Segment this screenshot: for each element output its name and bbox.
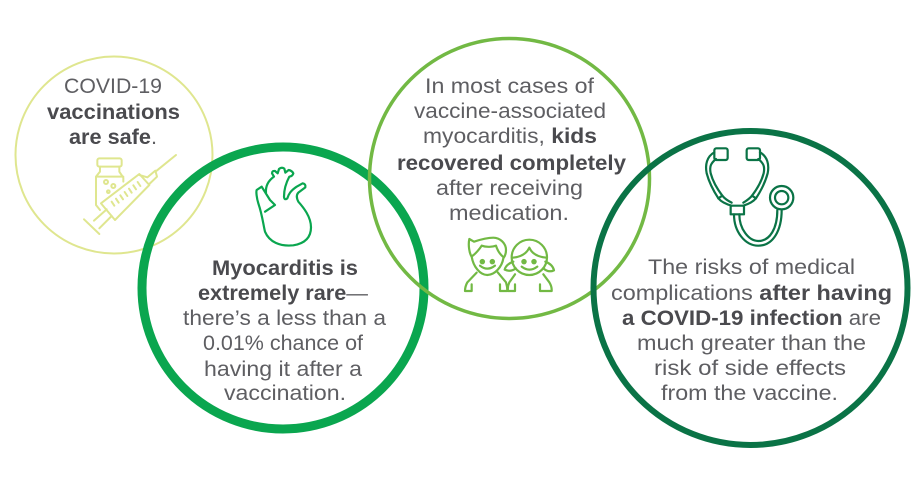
icon: stethoscope	[706, 148, 793, 246]
text: recovery statement: vaccine-associated	[414, 100, 606, 123]
text: risk statement: much greater than the	[637, 332, 866, 355]
text: myocarditis statement: vaccination.	[224, 382, 346, 405]
text: vaccinations are safe	[47, 75, 180, 149]
text: myocarditis statement	[183, 257, 386, 405]
text: recovery statement: myocarditis, kids	[423, 125, 597, 148]
text: risk statement: a COVID-19 infection are	[622, 307, 881, 330]
text: recovery statement: recovered completely	[397, 152, 626, 175]
text: recovery statement: medication.	[449, 202, 569, 225]
panel: medical complications	[594, 131, 908, 445]
text: risk statement: complications after having	[611, 282, 892, 305]
text: recovery statement: In most cases of	[425, 75, 594, 98]
text: myocarditis statement: having it after a	[204, 358, 362, 381]
panel: vaccinations are safe	[16, 56, 212, 254]
text: vaccinations are safe: are safe.	[69, 126, 157, 149]
text: vaccinations are safe: COVID-19	[64, 75, 162, 98]
text: recovery statement: after receiving	[436, 177, 583, 200]
icon: vial and syringe	[84, 155, 176, 234]
text: risk statement: from the vaccine.	[661, 382, 838, 405]
icon: two children	[465, 238, 554, 291]
icon: heart	[256, 168, 311, 246]
panel: kids recovered completely	[370, 38, 650, 318]
text: myocarditis statement: 0.01% chance of	[203, 332, 363, 355]
text: risk statement	[611, 256, 892, 405]
text: risk statement: The risks of medical	[648, 256, 855, 279]
text: myocarditis statement: there’s a less than a	[183, 307, 386, 330]
text: risk statement: risk of side effects	[654, 357, 846, 380]
text: recovery statement	[397, 75, 626, 225]
panel: myocarditis is extremely rare	[142, 147, 424, 429]
text: vaccinations are safe: vaccinations	[47, 101, 180, 124]
text: myocarditis statement: extremely rare—	[198, 282, 368, 305]
text: myocarditis statement: Myocarditis is	[212, 257, 358, 280]
